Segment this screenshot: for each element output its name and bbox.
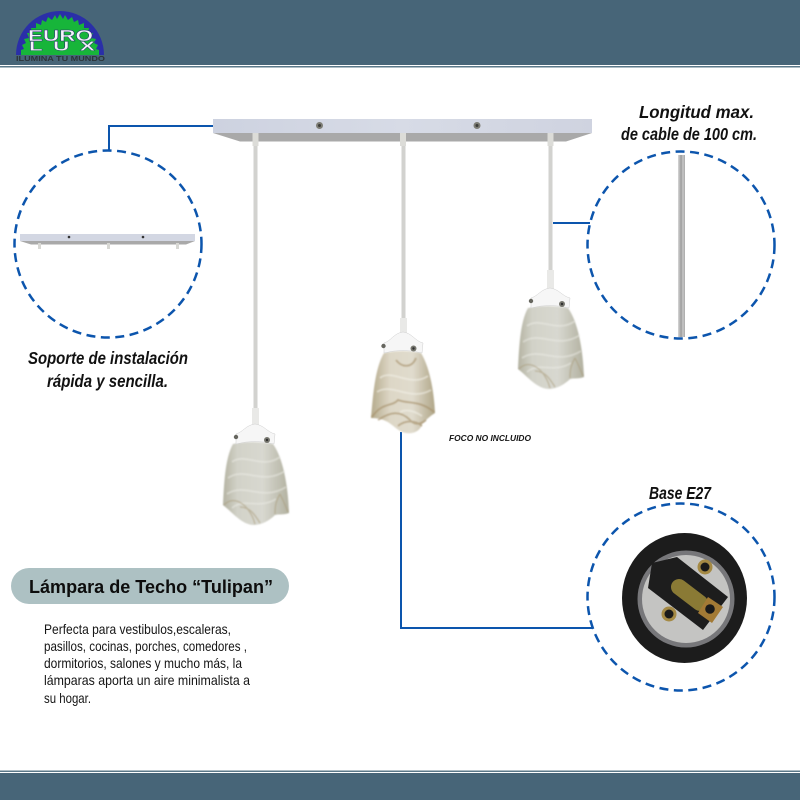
caption: canopy: Soporte de instalación: [28, 348, 188, 368]
description text: dormitorios, salones y mucho más, la: [44, 655, 242, 671]
caption: base E27: Base E27: [649, 483, 712, 503]
title pill: Lámpara de Techo “Tulipan”: [29, 576, 273, 597]
connector: center lamp to socket circle: [401, 432, 592, 628]
caption: canopy: [28, 348, 188, 391]
connector: cable to right circle: [553, 222, 590, 224]
lamp: center pendant: [371, 146, 435, 433]
description text: [44, 621, 250, 706]
caption: cable length: [621, 102, 757, 144]
note: bulb not included: FOCO NO INCLUIDO: [449, 433, 531, 443]
circle: canopy detail: [14, 150, 202, 338]
description text: Perfecta para vestibulos,escaleras,: [44, 621, 231, 637]
logo: Eurolux: [16, 11, 106, 63]
caption: cable length: Longitud max.: [639, 102, 754, 122]
connector: canopy to left circle: [109, 126, 214, 155]
title pill: [11, 568, 289, 604]
description text: lámparas aporta un aire minimalista a: [44, 672, 250, 688]
circle: E27 socket detail: [588, 504, 774, 690]
footer band: [0, 770, 800, 800]
ceiling canopy bar: [213, 119, 592, 146]
description text: su hogar.: [44, 690, 91, 706]
logo: Eurolux: ILUMINA TU MUNDO: [16, 56, 106, 63]
header band: [0, 0, 800, 68]
description text: pasillos, cocinas, porches, comedores ,: [44, 638, 247, 654]
logo: Eurolux: EURO: [28, 28, 93, 45]
circle: cable detail: [588, 152, 774, 338]
lamp: left pendant: [223, 146, 289, 525]
caption: canopy: rápida y sencilla.: [47, 371, 168, 391]
lamp: right pendant: [518, 146, 584, 389]
logo: Eurolux: LUX: [29, 40, 105, 53]
caption: cable length: de cable de 100 cm.: [621, 124, 757, 144]
